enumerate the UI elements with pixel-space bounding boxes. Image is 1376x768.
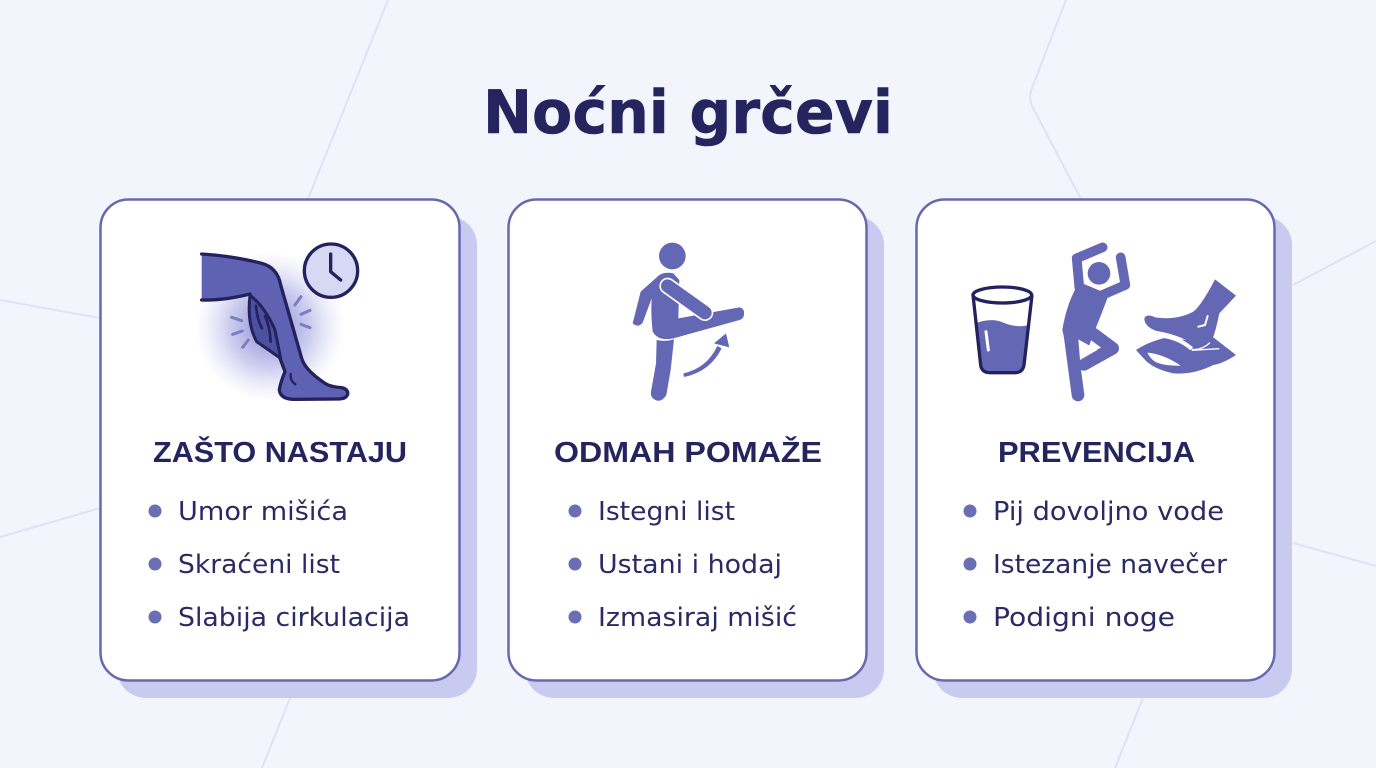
panel: prevention bbox=[916, 200, 1292, 698]
icon: stretching figure bbox=[1062, 247, 1125, 395]
bullet list: Podigni noge bbox=[993, 603, 1175, 633]
bullet list: Umor mišića bbox=[178, 497, 348, 527]
icon: cramping leg with clock bbox=[195, 244, 358, 402]
icon: foot on pillow bbox=[1136, 279, 1236, 374]
icon: glass of water bbox=[973, 287, 1032, 373]
bullet list: Izmasiraj mišić bbox=[598, 603, 797, 633]
bullet list: Slabija cirkulacija bbox=[178, 603, 410, 633]
heading: ZAŠTO NASTAJU bbox=[153, 435, 407, 469]
bullet list: Skraćeni list bbox=[178, 550, 340, 580]
bullet list bbox=[148, 497, 410, 633]
bullet list: Ustani i hodaj bbox=[598, 550, 782, 580]
icon: person stretching leg bbox=[633, 243, 744, 401]
panel: immediate help bbox=[508, 200, 884, 698]
bullet list: Istezanje navečer bbox=[993, 550, 1227, 580]
arrow bbox=[683, 333, 729, 377]
bullet list bbox=[964, 497, 1227, 633]
panel: causes bbox=[100, 200, 477, 698]
bullet list: Istegni list bbox=[598, 497, 735, 527]
title: Noćni grčevi bbox=[483, 78, 893, 148]
heading: PREVENCIJA bbox=[998, 437, 1195, 469]
bullet list: Pij dovoljno vode bbox=[993, 497, 1224, 527]
heading: ODMAH POMAŽE bbox=[554, 435, 822, 469]
bullet list bbox=[568, 497, 797, 633]
